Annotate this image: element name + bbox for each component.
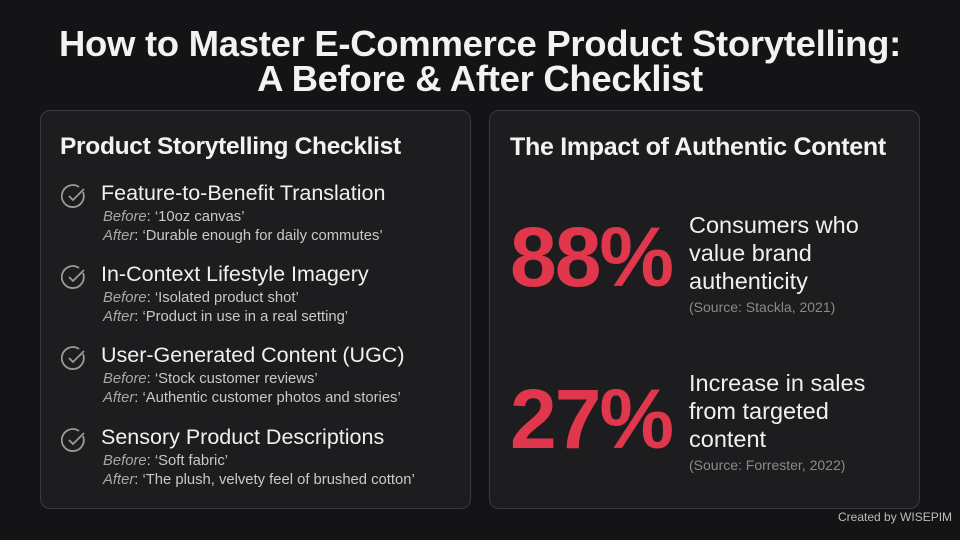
item: UGC: After: ‘Authentic customer photos and stories’: [103, 390, 401, 406]
stat: 88%: value brand: [689, 240, 812, 266]
item: feature-to-benefit: Before: ‘10oz canvas’: [103, 209, 244, 225]
item: sensory descriptions: After: ‘The plush, velvety feel of brushed cotton’: [103, 472, 415, 488]
panel: checklist: [40, 110, 471, 509]
item: sensory descriptions: [61, 425, 415, 488]
item: UGC: Before: ‘Stock customer reviews’: [103, 371, 318, 387]
stat: 88%: [510, 210, 859, 315]
stat: 27%: [510, 370, 865, 473]
item: lifestyle imagery: In-Context Lifestyle Imagery: [101, 262, 369, 286]
item: UGC: [61, 343, 404, 406]
panel heading: checklist: Product Storytelling Checklist: [60, 133, 401, 160]
stat: 88%: authenticity: [689, 268, 808, 294]
panel: impact: [489, 110, 920, 509]
footer credit: Created by WISEPIM: [838, 510, 952, 524]
title: A Before & After Checklist: [257, 58, 703, 99]
item: lifestyle imagery: Before: ‘Isolated product shot’: [103, 290, 299, 306]
title: [59, 23, 901, 99]
item: sensory descriptions: Sensory Product Descriptions: [101, 425, 384, 449]
item: lifestyle imagery: After: ‘Product in use in a real setting’: [103, 309, 348, 325]
stat: 88%: 88%: [510, 210, 672, 304]
item: lifestyle imagery: [61, 262, 369, 325]
item: feature-to-benefit: Feature-to-Benefit Translation: [101, 181, 385, 205]
item: feature-to-benefit: After: ‘Durable enough for daily commutes’: [103, 228, 383, 244]
stat: 27%: 27%: [510, 372, 672, 466]
stat: 27%: content: [689, 426, 766, 452]
title: How to Master E-Commerce Product Storytelling:: [59, 23, 901, 64]
stat: 27%: from targeted: [689, 398, 829, 424]
stat: 88%: (Source: Stackla, 2021): [689, 299, 835, 315]
item: sensory descriptions: Before: ‘Soft fabric’: [103, 453, 228, 469]
item: feature-to-benefit: [61, 181, 385, 244]
item: UGC: User-Generated Content (UGC): [101, 343, 404, 367]
stat: 88%: Consumers who: [689, 212, 859, 238]
panel heading: impact: The Impact of Authentic Content: [510, 133, 886, 161]
stat: 27%: Increase in sales: [689, 370, 865, 396]
stat: 27%: (Source: Forrester, 2022): [689, 457, 845, 473]
